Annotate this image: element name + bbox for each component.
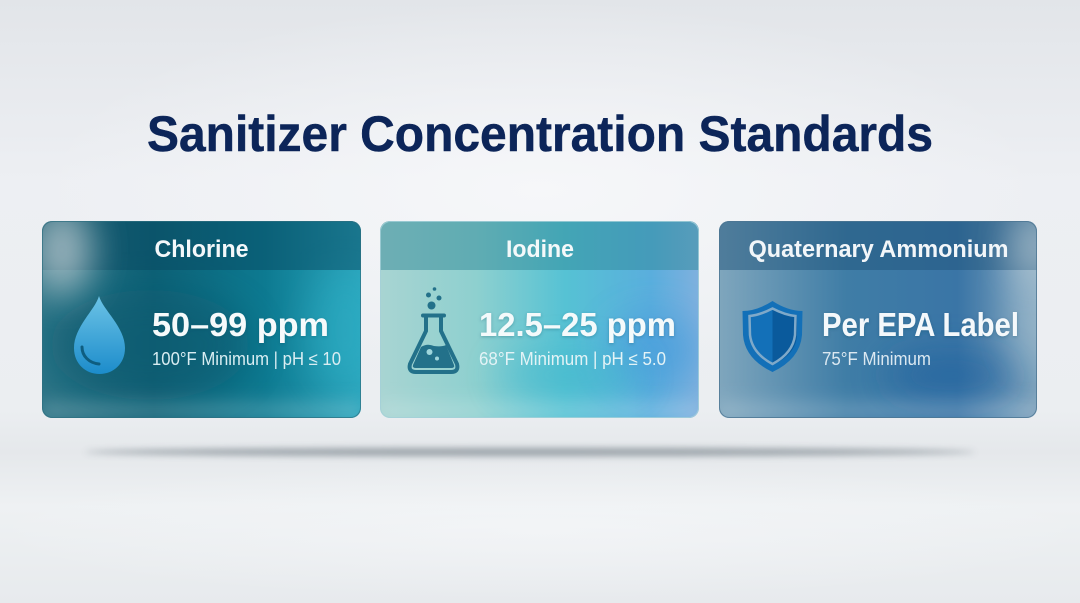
conditions: iodine: 68°F Minimum | pH ≤ 5.0 bbox=[479, 349, 666, 369]
concentration: quaternary ammonium: Per EPA Label bbox=[822, 306, 1019, 343]
floor shadow bbox=[85, 448, 975, 456]
icon: flask bbox=[410, 287, 457, 372]
panel: chlorine bbox=[42, 221, 361, 418]
concentration: chlorine: 50–99 ppm bbox=[152, 306, 329, 343]
heading: chlorine: Chlorine bbox=[154, 236, 248, 263]
icon: water drop bbox=[74, 296, 125, 374]
concentration: iodine: 12.5–25 ppm bbox=[479, 306, 676, 343]
panel: quaternary ammonium bbox=[719, 221, 1037, 418]
conditions: quaternary ammonium: 75°F Minimum bbox=[822, 349, 931, 369]
heading: iodine: Iodine bbox=[506, 236, 574, 263]
panel: iodine bbox=[380, 221, 700, 418]
icon: shield bbox=[742, 301, 802, 372]
conditions: chlorine: 100°F Minimum | pH ≤ 10 bbox=[152, 349, 341, 369]
heading: quaternary ammonium: Quaternary Ammonium bbox=[748, 236, 1008, 263]
title: Sanitizer Concentration Standards bbox=[147, 106, 933, 162]
